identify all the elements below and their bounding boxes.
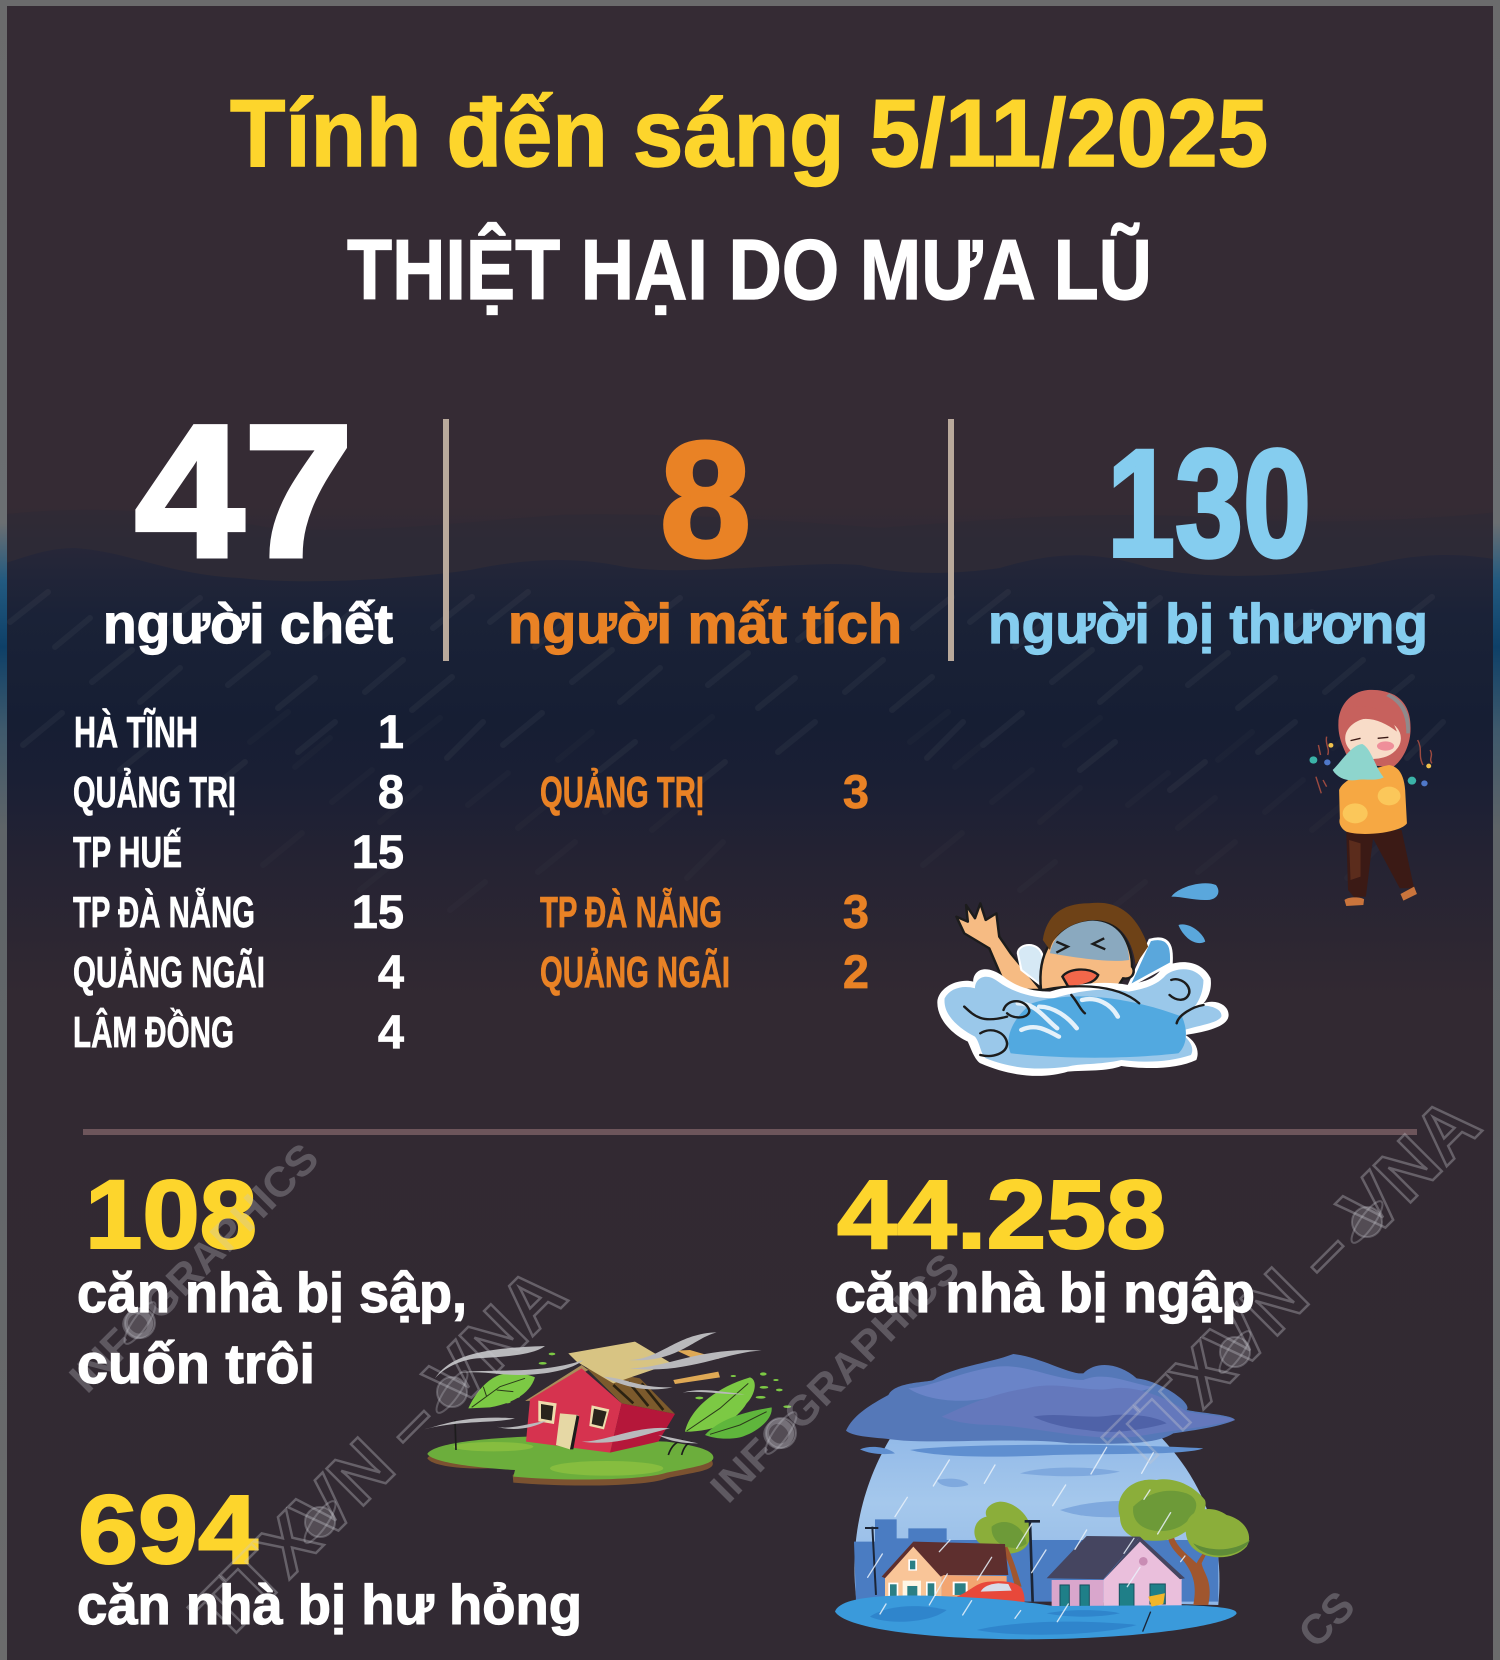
list: deaths by province <box>73 705 404 1058</box>
list: deaths by province: QUẢNG TRỊ <box>73 767 236 817</box>
number: injured: 130 <box>1107 418 1311 589</box>
label: deaths: người chết <box>103 592 393 655</box>
watermark: infographics left: INFOGRAPHICS <box>60 1134 327 1401</box>
watermark: infographics centre: INFOGRAPHICS <box>701 1244 968 1511</box>
list: missing by province: 3 <box>843 765 869 818</box>
number: deaths: 47 <box>135 386 353 596</box>
number: missing: 8 <box>660 408 751 591</box>
label: damaged houses: căn nhà bị hư hỏng <box>77 1573 582 1636</box>
list: deaths by province: 4 <box>378 945 404 998</box>
panel: injured <box>988 418 1428 655</box>
watermarks <box>60 1081 1496 1657</box>
panel: collapsed houses number: 108 <box>85 1160 257 1269</box>
title main line: THIỆT HẠI DO MƯA LŨ <box>347 222 1152 318</box>
background waves <box>0 510 1500 722</box>
watermark: globe marks <box>120 1198 1387 1546</box>
rain streaks <box>10 592 1443 910</box>
list: missing by province: 2 <box>843 945 869 998</box>
title date line: Tính đến sáng 5/11/2025 <box>230 80 1268 187</box>
list: missing by province: QUẢNG TRỊ <box>540 767 704 817</box>
list: deaths by province: TP HUẾ <box>73 827 182 877</box>
panel: deaths <box>73 386 404 1058</box>
list: deaths by province: 15 <box>352 885 404 938</box>
panel: missing <box>508 408 902 998</box>
label: flooded houses: căn nhà bị ngập <box>835 1261 1255 1324</box>
list: deaths by province: 4 <box>378 1005 404 1058</box>
list: missing by province: 3 <box>843 885 869 938</box>
list: deaths by province: HÀ TĨNH <box>74 707 198 757</box>
label: collapsed houses <box>77 1261 467 1395</box>
label: injured: người bị thương <box>988 592 1428 655</box>
label: collapsed houses: căn nhà bị sập, <box>77 1261 467 1324</box>
label: collapsed houses: cuốn trôi <box>77 1332 315 1395</box>
panel: flooded houses number: 44.258 <box>837 1160 1166 1269</box>
list: deaths by province: 8 <box>378 765 404 818</box>
panel: damaged houses number: 694 <box>78 1475 258 1584</box>
icon: storm-hit house <box>424 1332 791 1486</box>
watermark: infographics bottom right fragment: CS <box>1289 1582 1364 1656</box>
list: missing by province: QUẢNG NGÃI <box>540 947 730 997</box>
list: deaths by province: QUẢNG NGÃI <box>73 947 265 997</box>
list: deaths by province: 15 <box>352 825 404 878</box>
icon: flooded neighbourhood <box>835 1354 1250 1639</box>
watermark: ttxvn vna right: TTXVN – VNA <box>1090 1081 1496 1487</box>
label: missing: người mất tích <box>508 592 902 655</box>
list: deaths by province: 1 <box>378 705 404 758</box>
heading block <box>230 80 1268 318</box>
icon: drowning person <box>937 883 1229 1076</box>
watermark: ttxvn vna left: TTXVN – VNA <box>176 1251 582 1657</box>
list: missing by province <box>540 765 869 998</box>
list: missing by province: TP ĐÀ NẴNG <box>540 887 722 937</box>
icon: sick woman <box>1309 690 1432 906</box>
list: deaths by province: TP ĐÀ NẴNG <box>73 887 255 937</box>
list: deaths by province: LÂM ĐỒNG <box>73 1007 234 1057</box>
